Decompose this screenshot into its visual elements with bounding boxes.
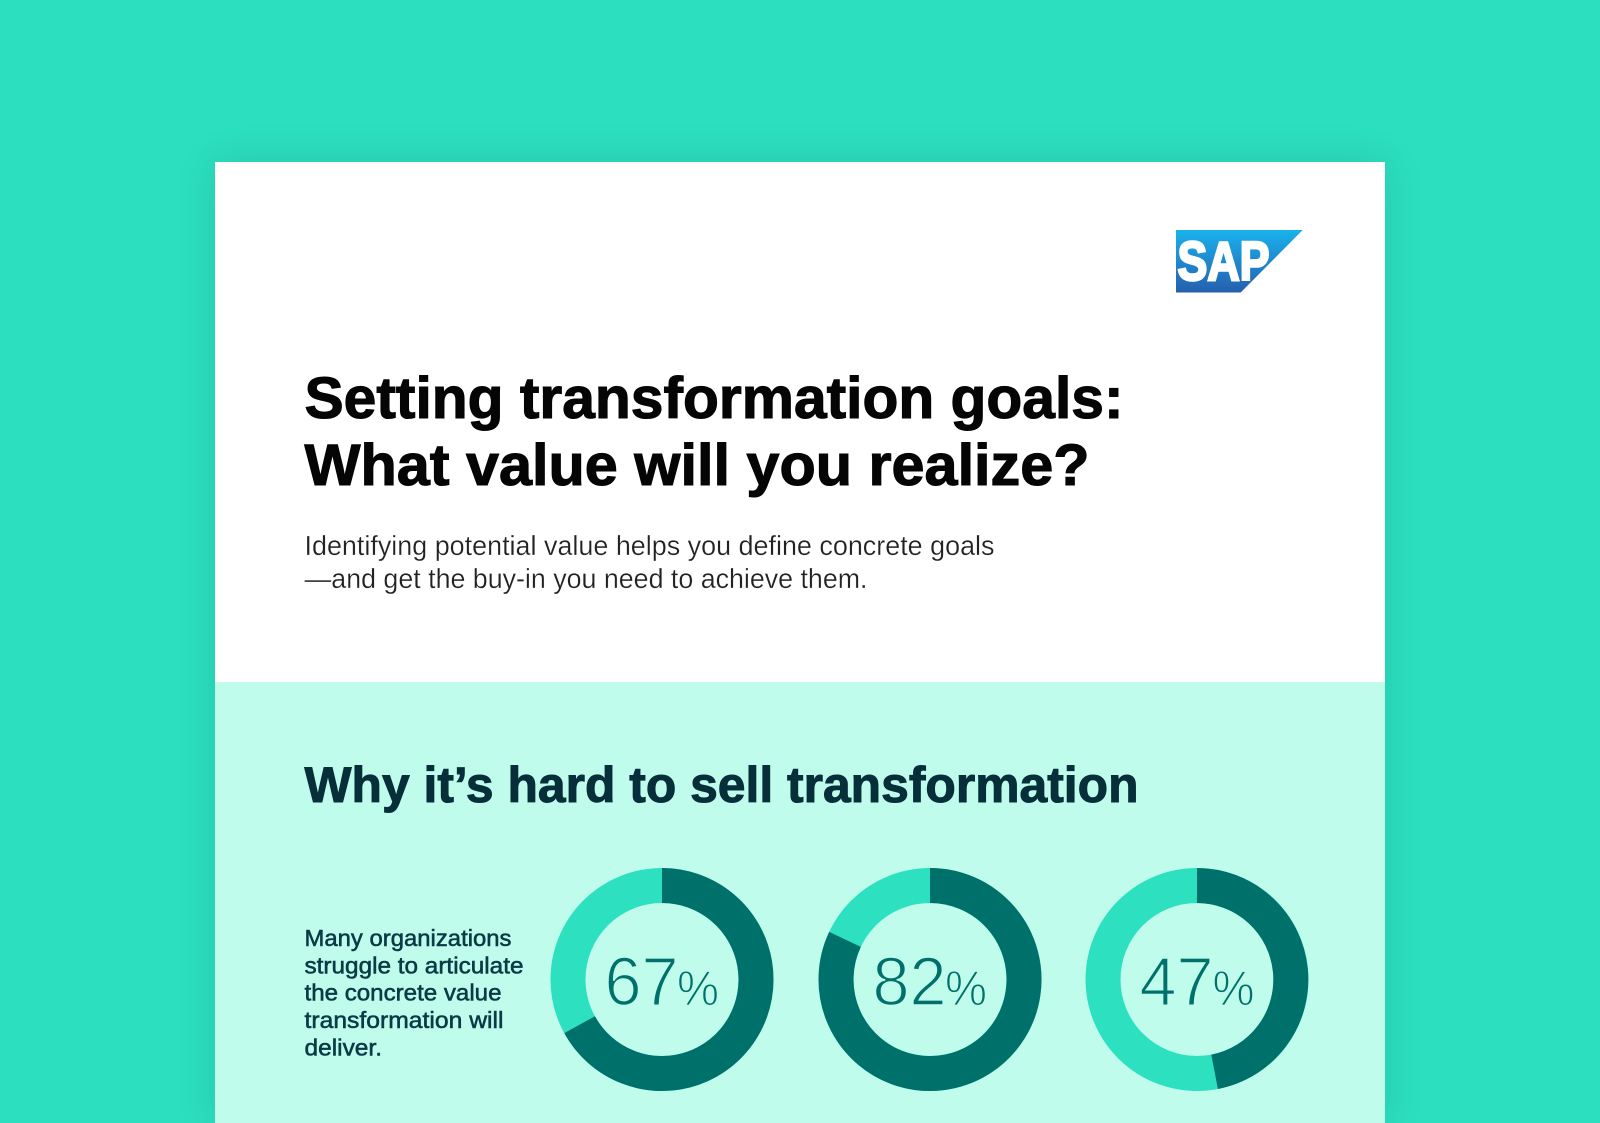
title: Setting transformation goals: bbox=[304, 366, 1124, 431]
subtitle: Identifying potential value helps you define concrete goals bbox=[304, 530, 994, 561]
text block: statistics intro: the concrete value bbox=[304, 980, 502, 1006]
heading: why it's hard: Why it’s hard to sell transformation bbox=[304, 757, 1138, 813]
subtitle bbox=[304, 530, 994, 594]
subtitle: —and get the buy-in you need to achieve them. bbox=[304, 563, 868, 594]
chart: donut 47%: 47 bbox=[1140, 943, 1214, 1020]
title bbox=[304, 366, 1124, 498]
chart: donut 82% bbox=[836, 885, 1024, 1074]
chart: donut 47% bbox=[1103, 886, 1291, 1074]
text block: statistics intro: transformation will bbox=[304, 1007, 504, 1033]
text block: statistics intro bbox=[304, 925, 524, 1061]
text block: statistics intro: struggle to articulate bbox=[304, 952, 524, 978]
chart: donut 47%: % bbox=[1212, 962, 1254, 1016]
chart: donut 67%: 67 bbox=[604, 943, 678, 1020]
chart: donut 82%: 82 bbox=[872, 943, 946, 1020]
text block: statistics intro: Many organizations bbox=[304, 925, 512, 951]
chart: donut 67% bbox=[568, 886, 756, 1074]
icon: SAP logo: SAP bbox=[1178, 230, 1270, 292]
title: What value will you realize? bbox=[304, 433, 1090, 498]
panel: white card bbox=[215, 162, 1385, 1123]
text block: statistics intro: deliver. bbox=[304, 1035, 382, 1061]
chart: donut 67%: % bbox=[677, 962, 719, 1016]
chart: donut 82%: % bbox=[945, 962, 987, 1016]
panel: mint statistics section bbox=[215, 682, 1385, 1123]
